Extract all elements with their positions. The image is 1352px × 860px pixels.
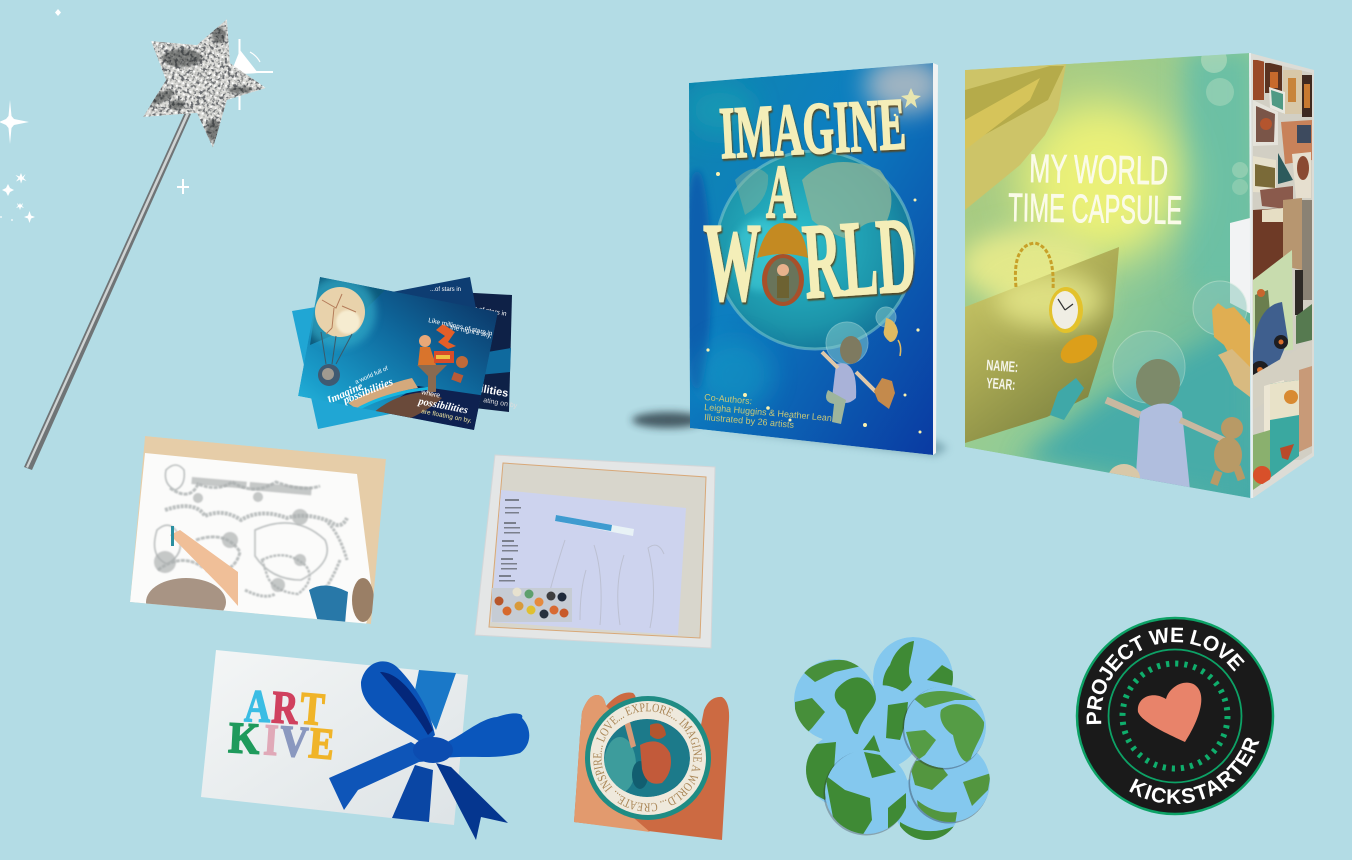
teal badge: [585, 696, 711, 820]
coin: [838, 685, 922, 769]
canvas frame: [475, 455, 715, 648]
back card right: ...millions of stars in: [450, 301, 507, 318]
coin: [873, 637, 954, 717]
hand: [574, 693, 729, 840]
back card top: [392, 277, 480, 330]
box side collage: [1250, 53, 1315, 498]
panel: paint by numbers canvas: [475, 455, 715, 648]
brush tube: [555, 515, 634, 536]
back card top: ...of stars in: [430, 287, 461, 293]
teddy bear: [874, 378, 895, 409]
lavender sheet: [491, 490, 686, 635]
white tab notch: [1230, 218, 1250, 314]
card text: Like millions of stars in: [428, 317, 493, 338]
icon: sparkles: [0, 9, 273, 223]
teddy bear: [1210, 417, 1245, 486]
chest lid: [965, 64, 1066, 210]
back card right: ating on by: [483, 397, 518, 410]
book title: [703, 83, 919, 325]
panel: colouring map photo: [130, 436, 386, 626]
card text: possibilities: [341, 376, 395, 407]
card text: Imagine: [324, 380, 365, 407]
panel: seed paper earth coins: [794, 637, 991, 845]
panel: hand holding world badge: [574, 692, 730, 840]
hot air balloon: [315, 287, 365, 386]
coin shadow: [902, 686, 986, 770]
wand stick: [24, 112, 191, 470]
panel: artkive gift card: [201, 650, 529, 840]
pocket watch: [1049, 287, 1098, 364]
artkive logo: R: [270, 681, 300, 734]
left loop: [361, 661, 435, 745]
chest body: [965, 247, 1119, 443]
book title: A: [766, 150, 796, 234]
badge label: project we love: PROJECT WE LOVE: [1086, 628, 1245, 724]
icon: star wand: [24, 19, 266, 470]
author credit: Leigha Huggins & Heather Lean: [704, 402, 832, 423]
coin: [909, 742, 991, 825]
panel: hand holding world badge: INSPIRE... LOVE... EXPLORE... IMAGINE A WORLD... CREATE...: [593, 703, 702, 812]
pocket watch chain: [1015, 243, 1053, 290]
artkive logo: T: [298, 682, 326, 735]
artkive logo: [227, 680, 336, 769]
back card right: [420, 290, 518, 412]
astronaut cat: [876, 307, 901, 356]
beige backing: [489, 463, 706, 638]
coin: [904, 686, 986, 768]
path arc: [348, 378, 418, 410]
artkive logo: K: [227, 713, 261, 764]
coin shadow: [908, 742, 990, 824]
artkive logo: E: [307, 718, 336, 769]
navy lower panel: [384, 386, 481, 430]
box title: TIME CAPSULE: [1008, 186, 1183, 233]
blue cloth: [1050, 378, 1084, 420]
rock: [376, 392, 442, 418]
heart: [1138, 683, 1201, 742]
front edge highlight: [1250, 53, 1252, 498]
artkive logo: V: [278, 716, 310, 767]
card text: where: [420, 389, 441, 400]
box title: MY WORLD: [1029, 147, 1169, 193]
coin: [894, 774, 960, 845]
bokeh lights: [1201, 47, 1248, 195]
right loop: [440, 713, 529, 758]
explorer in hat: [757, 223, 808, 306]
coin: [825, 750, 909, 836]
coin: [806, 733, 880, 807]
book shadow: [632, 412, 704, 428]
book title: RLD: [799, 195, 919, 322]
coin shadow: [824, 750, 908, 836]
ribbon tails: [329, 742, 440, 810]
author credit: Co-Authors:: [704, 392, 753, 406]
globe: [716, 151, 914, 349]
badge label: kickstarter: KICKSTARTER: [1129, 738, 1260, 804]
child with blocks: [418, 324, 468, 383]
blue jacket: [309, 585, 348, 624]
tick ring: [1122, 664, 1228, 768]
back card right: ilities: [479, 383, 509, 400]
box front cover: [960, 47, 1255, 498]
arm: [170, 530, 238, 606]
sequin star: [143, 19, 266, 148]
paint pots: [492, 588, 572, 622]
artkive logo: A: [244, 680, 271, 732]
artkive logo: I: [262, 715, 280, 765]
instruction text lines: [499, 499, 521, 582]
card text: a world full of: [354, 366, 389, 386]
author credit: [704, 394, 832, 428]
white card: [201, 650, 468, 825]
coin: [794, 659, 876, 741]
astronaut child: [1106, 331, 1224, 492]
card text: the night's sky,: [450, 324, 493, 340]
inner ring: [1108, 650, 1242, 782]
wood table: [130, 436, 386, 624]
name label: NAME:: [986, 357, 1019, 376]
pedestal: [417, 365, 447, 392]
front card: [298, 276, 500, 432]
astronaut cat: [1193, 281, 1250, 397]
card text: possibilities: [416, 396, 469, 417]
panel: imagine a world book: [632, 57, 948, 456]
small stars: [706, 88, 922, 434]
badge ring text: [601, 711, 693, 803]
back card left: [292, 306, 390, 429]
badge disc: [1077, 618, 1273, 814]
panel: kickstarter project we love badge: [1076, 616, 1274, 816]
child hair: [146, 578, 226, 610]
panel: postcards: [292, 276, 518, 432]
badge inner artwork: [604, 719, 690, 797]
map doodles: [155, 465, 347, 596]
astronaut child: [822, 322, 895, 424]
panel: my world time capsule box: [960, 47, 1315, 498]
box title: [1008, 154, 1182, 224]
book title: IMAGINE: [718, 83, 908, 175]
card text: [324, 317, 493, 425]
blue ribbon bow: [329, 661, 529, 840]
upper strap: [415, 670, 456, 730]
year label: YEAR:: [986, 375, 1016, 394]
sketch lines: [545, 540, 664, 628]
author credit: Illustrated by 26 artists: [704, 412, 795, 430]
knot: [413, 737, 453, 763]
book title: W: [703, 201, 761, 325]
book pages: [933, 63, 938, 455]
card text: are floating on by.: [421, 408, 472, 425]
book cover: [683, 57, 945, 455]
